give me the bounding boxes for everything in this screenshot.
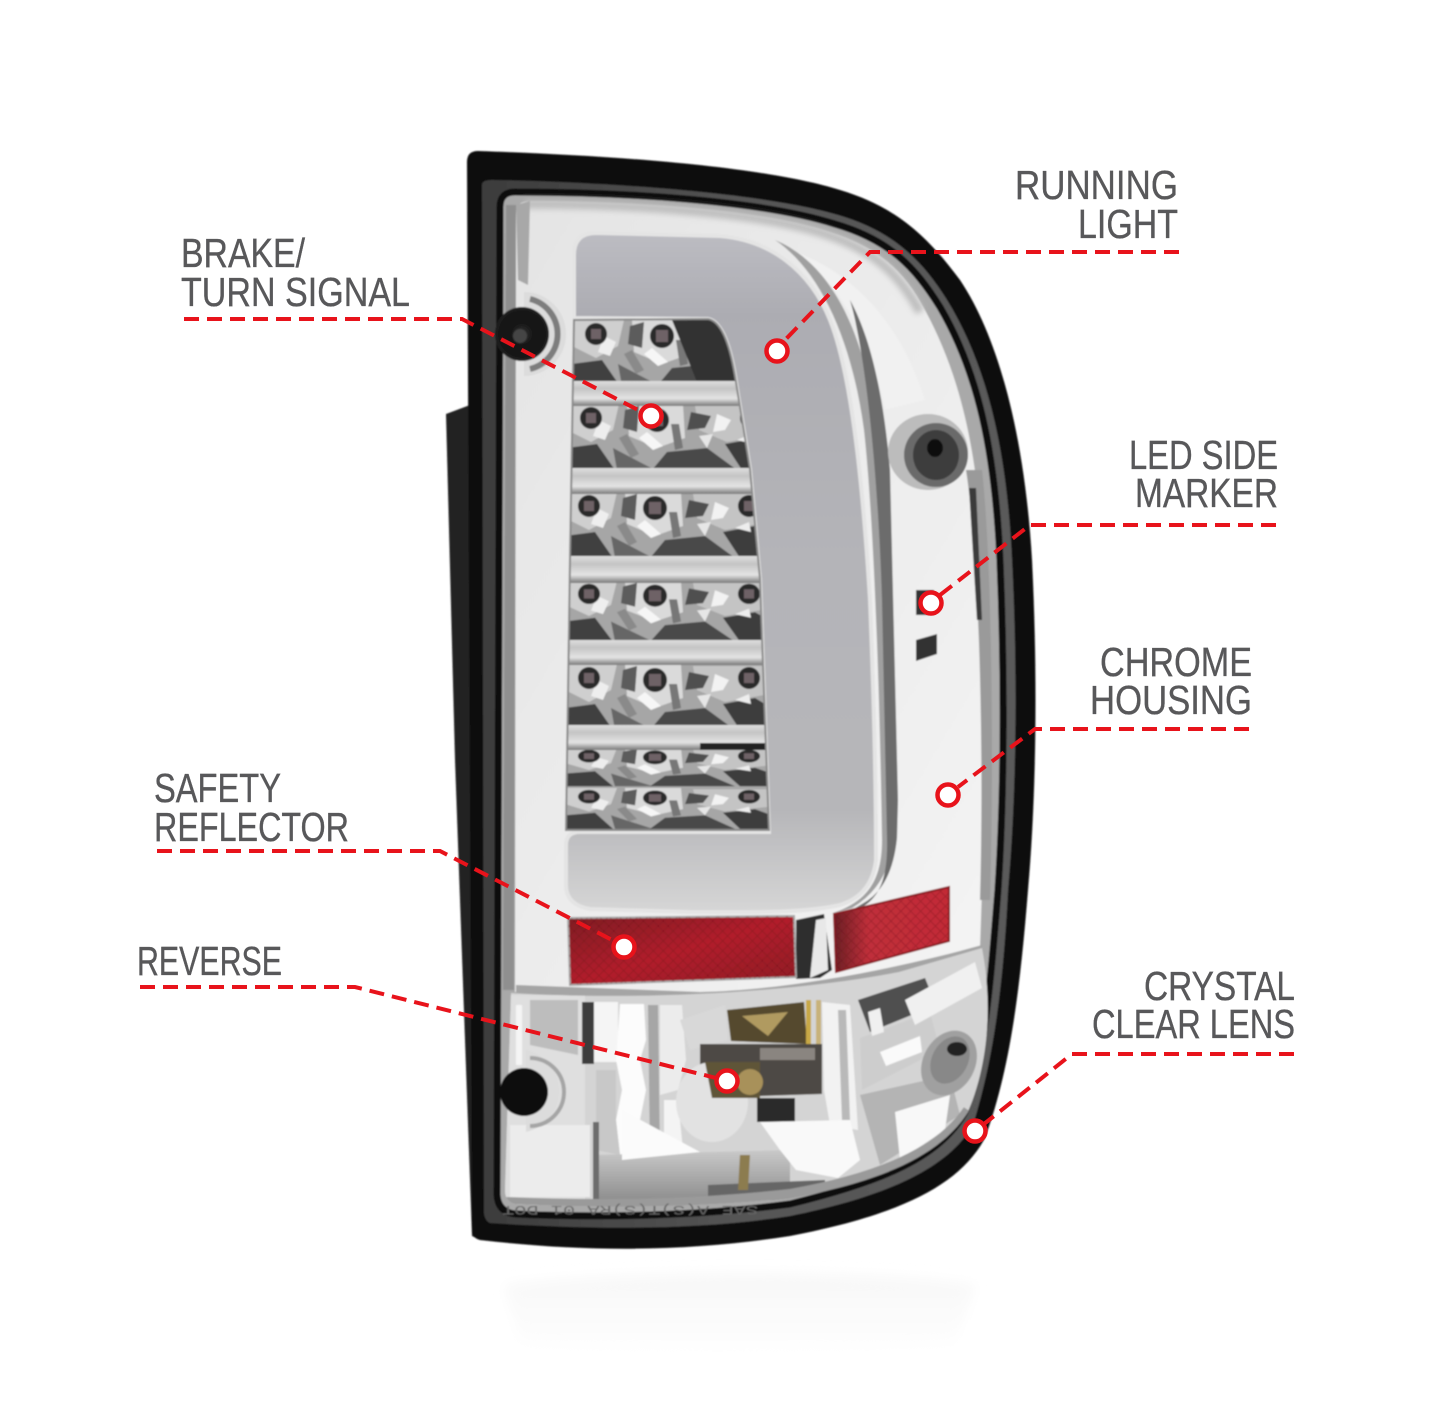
inner black gasket	[497, 192, 1003, 1216]
black outer housing	[467, 151, 1035, 1249]
label: chrome housing: HOUSING	[1090, 677, 1252, 723]
label: running light: RUNNING	[1015, 162, 1178, 208]
label: LED side marker: MARKER	[1135, 470, 1278, 516]
chrome side strip	[966, 470, 992, 900]
LED row 4	[569, 582, 762, 640]
label: LED side marker	[1129, 432, 1278, 516]
label: chrome housing	[1090, 639, 1252, 723]
small red reflector	[834, 887, 949, 972]
label: safety reflector	[154, 765, 349, 850]
label: crystal clear lens: CLEAR LENS	[1092, 1001, 1295, 1047]
label: running light	[1015, 162, 1178, 247]
right facets	[858, 978, 936, 1032]
reflector divider trim	[516, 945, 982, 1000]
leader: running light	[766, 252, 1179, 362]
leader: LED side marker	[920, 525, 1276, 614]
LED row 6	[565, 748, 775, 786]
label: safety reflector: SAFETY	[154, 765, 281, 811]
LED row 1	[573, 319, 736, 382]
LED reflector panel	[566, 319, 769, 830]
top left chrome trim	[516, 201, 530, 285]
large red reflector	[568, 916, 796, 985]
chrome band beside tube	[775, 240, 892, 914]
side marker LED windows	[916, 590, 937, 661]
label: crystal clear lens	[1092, 963, 1295, 1047]
label: running light: LIGHT	[1078, 201, 1178, 247]
label: chrome housing: CHROME	[1100, 639, 1252, 685]
label: reverse: REVERSE	[137, 938, 282, 984]
rear mounting flange	[446, 405, 476, 1238]
center right chrome	[822, 1002, 858, 1130]
chrome divider bars	[560, 381, 760, 406]
chrome blob above bulb	[680, 1020, 684, 1028]
leader: crystal clear lens	[964, 1054, 1294, 1142]
label: crystal clear lens: CRYSTAL	[1144, 963, 1295, 1009]
tail light product photo	[446, 151, 1035, 1249]
lower band	[593, 1150, 790, 1200]
leader: safety reflector	[157, 851, 634, 958]
leader: brake turn signal	[184, 319, 662, 426]
chrome lens panel	[515, 201, 986, 996]
lens bottom edge	[505, 1110, 968, 1204]
label: brake turn signal: BRAKE/	[181, 230, 305, 276]
light tube	[566, 233, 876, 912]
chrome block between reflectors	[796, 914, 832, 979]
leader: chrome housing	[938, 729, 1249, 806]
gray rim	[482, 180, 1015, 1228]
left lens zone	[505, 995, 585, 1205]
top-left mounting bolt	[495, 292, 566, 376]
LED row 3	[570, 493, 758, 556]
LED panel frame	[566, 319, 769, 830]
left chrome strip	[503, 205, 516, 990]
clear reverse lens	[504, 948, 990, 1206]
label: LED side marker: LED SIDE	[1129, 432, 1278, 478]
bottom-left mounting bolt	[500, 1050, 564, 1132]
bulb socket	[727, 1002, 807, 1044]
right mounting bolt	[888, 414, 968, 490]
embossed mold text: SAE A(S)T(S)RA 01 DOT	[502, 1202, 758, 1217]
LED row 2	[572, 405, 750, 468]
small lens bolt	[920, 1030, 978, 1096]
bottom-left clear area	[510, 1125, 590, 1197]
bulb	[676, 1062, 748, 1142]
label: safety reflector: REFLECTOR	[154, 804, 349, 850]
top edge shading	[525, 204, 920, 312]
floor reflection	[505, 1274, 975, 1356]
label: brake turn signal	[181, 230, 410, 315]
LED row 5	[568, 664, 765, 726]
leader: reverse	[140, 987, 738, 1092]
label: brake turn signal: TURN SIGNAL	[181, 269, 410, 315]
vertical chrome strips	[616, 1004, 646, 1155]
top right highlight	[790, 250, 925, 410]
